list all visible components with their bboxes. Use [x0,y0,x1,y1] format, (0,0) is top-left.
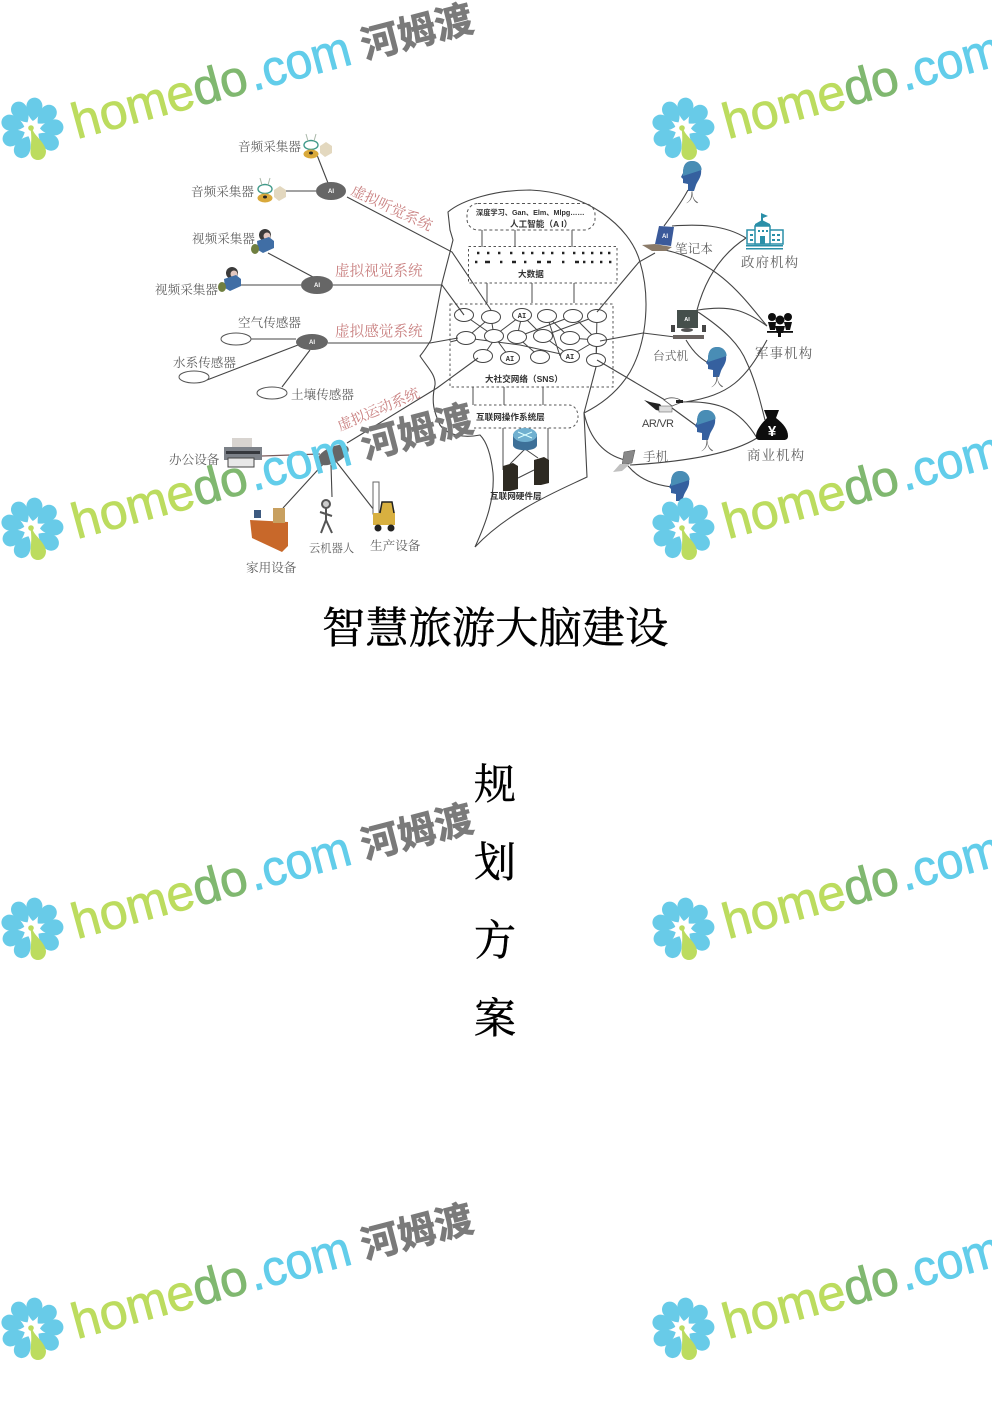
label: phone: 手机 [643,449,669,464]
icon: desktop computer: AI [684,317,690,323]
icon: forklift [373,482,395,532]
subtitle vertical text: 规 [474,763,516,809]
AI hub: motion [314,441,352,469]
panel: internet hardware layer [490,428,549,501]
subtitle vertical text: 案 [474,997,516,1043]
label: cloud robot: 云机器人 [309,541,354,555]
icon: cloud robot [320,500,332,533]
icon: air sensor [221,333,251,345]
panel: social network layer: AI [566,354,574,362]
watermark 1 [0,0,478,161]
text: SNS: 大社交网络（SNS） [485,373,563,384]
icon: AR/VR glasses [644,398,683,412]
watermark 1: home [65,63,201,150]
label: video collector 2: 视频采集器 [155,282,218,297]
watermark 7: 河姆渡 [357,1199,478,1268]
icon: person 4 [669,471,690,501]
label: audio collector 1: 音频采集器 [238,139,301,154]
icon: mobile phone [613,450,635,472]
panel: AI layer [467,204,595,230]
label: person 4: 人 [677,501,690,515]
label: home equipment: 家用设备 [246,561,297,575]
icon: camera 1 [251,229,274,254]
icon: audio collector 2 [258,178,286,202]
icon: military group [767,313,793,337]
text: OS layer: 互联网操作系统层 [476,411,545,422]
subtitle vertical text [474,763,516,1043]
watermark 1: 河姆渡 [357,0,478,68]
label: person 1: 人 [686,191,699,205]
icon: soil sensor [257,387,287,399]
icon: server [534,457,549,485]
label: person 2: 人 [711,375,724,389]
watermark 6: home [716,863,852,950]
label: office equipment: 办公设备 [169,452,220,467]
icon: money bag [756,410,788,440]
label: virtual motion system: 虚拟运动系统 [335,385,423,435]
subtitle vertical text: 划 [474,841,516,887]
icon: camera 2 [218,267,241,292]
watermark 6: do [837,848,905,917]
AI hub: sensory: AI [309,340,315,346]
label: laptop: 笔记本 [675,241,713,256]
label: commercial: 商业机构 [747,447,805,463]
watermark 5: .com [242,820,357,902]
panel: smart brain network diagram [155,134,813,575]
watermark 8: home [716,1263,852,1350]
watermark 3: 河姆渡 [357,399,478,468]
panel: internet OS layer [474,405,578,428]
label: water sensor: 水系传感器 [173,355,236,370]
watermark 5: home [65,863,201,950]
label: desktop: 台式机 [653,349,688,363]
watermark 1: .com [242,20,357,102]
text: hardware layer: 互联网硬件层 [490,490,542,501]
watermark 8: do [837,1248,905,1317]
icon: audio collector 1 [304,134,332,158]
watermark 4: do [837,448,905,517]
label: audio collector 2: 音频采集器 [191,184,254,199]
AI hub: sensory [296,334,328,350]
label: AR/VR: AR/VR [642,418,674,430]
watermark 2 [651,20,992,161]
label: government: 政府机构 [741,254,799,270]
watermark 2: home [716,63,852,150]
icon: person 1 [681,161,702,191]
AI hub: visual [301,276,333,294]
label: video collector 1: 视频采集器 [192,231,255,246]
watermark 3 [0,399,478,561]
label: production equipment: 生产设备 [370,538,421,553]
icon: laptop: AI [662,234,668,240]
panel: social network layer: AI [506,356,514,364]
label: virtual sensory system: 虚拟感觉系统 [335,322,423,340]
icon: router [513,428,537,450]
watermark 2: do [837,48,905,117]
subtitle vertical text: 方 [474,918,516,965]
watermark 3: .com [242,420,357,502]
left connection lines [207,155,491,510]
icon: money bag: ¥ [768,423,777,440]
text: AI layer name: 人工智能（A I） [510,218,572,229]
label: soil sensor: 土壤传感器 [291,387,354,402]
text: big data: 大数据 [518,268,544,279]
icon: server [503,463,518,491]
label: virtual visual system: 虚拟视觉系统 [335,262,423,280]
AI hub: visual: AI [314,283,320,289]
AI hub: auditory: AI [328,189,334,195]
icon: printer [224,438,262,467]
panel: social network layer [450,304,613,387]
title: 智慧旅游大脑建设 [322,605,668,653]
panel: social network layer: AI [518,313,526,321]
label: military: 军事机构 [755,345,813,361]
watermark 1: do [186,48,254,117]
panel: big data layer [468,246,617,283]
icon: person 2 [706,347,727,377]
connectors AI to big data [473,230,574,470]
watermark 4: home [716,463,852,550]
label: person 3: 人 [701,439,714,453]
watermark 5: do [186,848,254,917]
watermark 7 [0,1199,478,1361]
label: virtual auditory system: 虚拟听觉系统 [348,182,435,235]
watermark 5: 河姆渡 [357,799,478,868]
icon: water sensor [179,371,209,383]
watermark 4 [651,420,992,561]
AI hub: auditory [316,182,346,200]
watermark 3: home [65,463,201,550]
watermark 7: home [65,1263,201,1350]
icon: government building [746,213,783,250]
icon: person 3 [695,410,716,440]
watermark 5 [0,799,478,961]
watermark 3: do [186,448,254,517]
icon: laptop [642,226,674,251]
watermark 8 [651,1220,992,1361]
watermark 6 [651,820,992,961]
right connection lines [584,190,767,487]
text: deep learning: 深度学习、Gan、Elm、Mlpg…… [476,208,585,217]
label: air sensor: 空气传感器 [238,315,301,330]
icon: desktop computer [671,310,706,339]
head outline [420,190,646,547]
watermark 7: .com [242,1220,357,1302]
watermark 7: do [186,1248,254,1317]
icon: home equipment box [250,508,288,552]
